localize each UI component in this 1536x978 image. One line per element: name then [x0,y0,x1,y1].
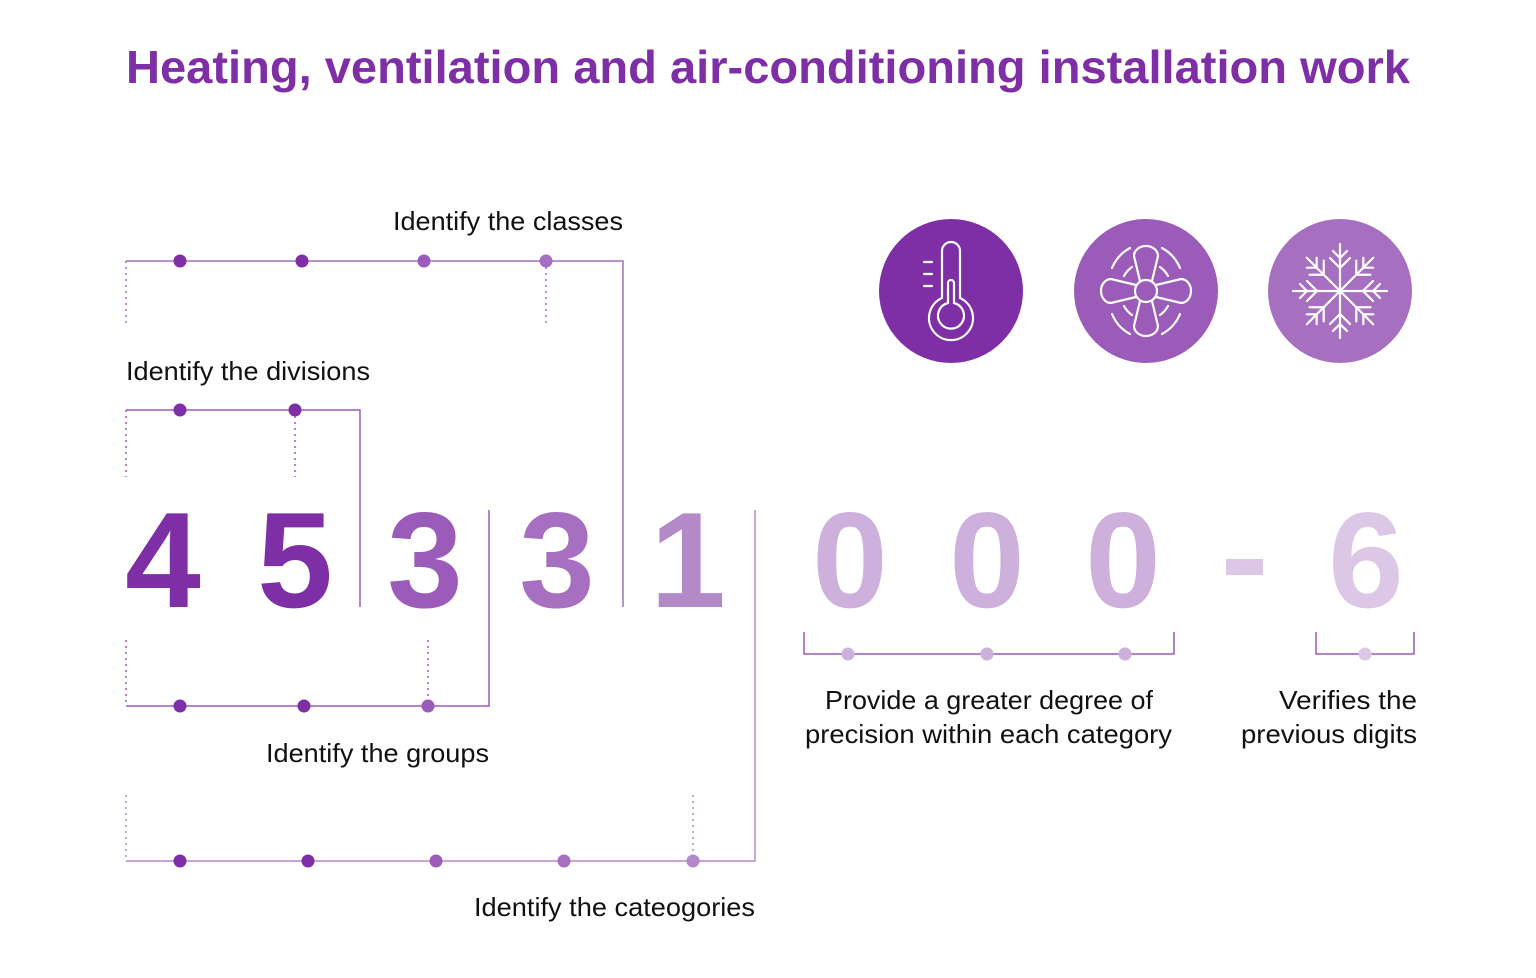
label: check digit [1241,685,1417,749]
title: Heating, ventilation and air-conditioning installation work [126,41,1410,93]
bracket: groups [126,510,489,712]
code digits: 0 [1085,484,1161,636]
label: precision: Provide a greater degree of [825,685,1154,715]
icon: thermometer [879,219,1023,363]
label: precision: precision within each category [805,719,1172,749]
label: check digit: Verifies the [1279,685,1417,715]
code digits [125,484,1404,636]
code digits: 0 [812,484,888,636]
dash [1226,559,1263,575]
bracket: check digit [1316,632,1414,660]
code digits: 5 [257,484,333,636]
label: classes: Identify the classes [393,206,623,236]
bracket: divisions [126,404,360,607]
code digits: 6 [1328,484,1404,636]
icon: fan [1074,219,1218,363]
code digits: 3 [387,484,463,636]
label: categories: Identify the cateogories [474,892,755,922]
label: precision [805,685,1172,749]
bracket: precision [804,632,1174,660]
bracket: classes [126,254,623,607]
code digits: 3 [519,484,595,636]
bracket: categories [126,510,755,868]
label: divisions: Identify the divisions [126,356,370,386]
icon: snowflake [1268,219,1412,363]
label: check digit: previous digits [1241,719,1417,749]
code digits: 1 [650,484,726,636]
code digits: 4 [125,484,201,636]
code digits: 0 [949,484,1025,636]
label: groups: Identify the groups [266,738,489,768]
